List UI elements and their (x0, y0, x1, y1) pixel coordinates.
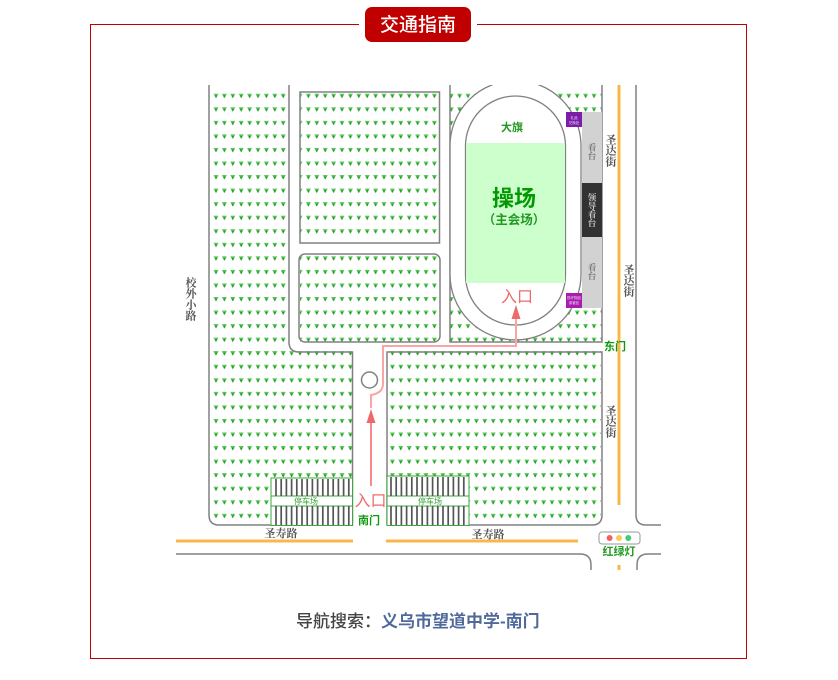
road name: Shengda street lower: 圣达街 (604, 404, 616, 439)
right parking lot (387, 476, 469, 526)
campus map (176, 81, 661, 570)
purple room north (566, 112, 582, 127)
grandstands: 看台 (587, 142, 597, 161)
entry route arrow (366, 305, 520, 486)
road name: Shengda street middle: 圣达街 (622, 263, 634, 298)
road name: Shengda street upper: 圣达街 (604, 133, 616, 168)
right parking lot: 停车场 (418, 496, 442, 506)
road name: outside lane: 校外小路 (184, 276, 196, 322)
purple room north: 兑换处 (569, 120, 580, 125)
east gate label: 东门 (604, 339, 626, 353)
road name: Shengshou road right: 圣寿路 (472, 527, 504, 541)
yellow road centre lines (176, 85, 619, 570)
purple room south: 损坏物品 (567, 295, 581, 300)
left parking lot: 停车场 (294, 496, 318, 506)
south gate label: 南门 (358, 513, 380, 527)
entrance label south: 入口 (354, 493, 387, 510)
traffic light (599, 532, 640, 558)
purple room south: 保管处 (569, 300, 580, 305)
left parking lot (271, 478, 352, 526)
flag label: 大旗 (501, 120, 523, 134)
road outlines (176, 85, 661, 570)
field name: 操场 (492, 186, 536, 211)
tree areas (212, 85, 602, 524)
navigation search line: 导航搜索：义乌市望道中学-南门 (296, 611, 540, 631)
purple room south (566, 293, 582, 308)
outer red frame (90, 24, 746, 658)
purple room north: 礼品 (570, 115, 578, 120)
playing field (466, 143, 565, 283)
title badge (359, 7, 477, 42)
field subtitle: （主会场） (483, 212, 545, 227)
entrance label east: 入口 (501, 289, 533, 306)
title badge: 交通指南 (380, 14, 456, 36)
traffic light: 红绿灯 (602, 544, 636, 558)
road name: Shengshou road left: 圣寿路 (264, 526, 298, 540)
grandstands: 领导看台 (587, 192, 597, 228)
grandstands: 看台 (587, 262, 597, 281)
sports track (450, 81, 581, 340)
roundabout (362, 372, 378, 388)
grandstands (582, 112, 602, 308)
